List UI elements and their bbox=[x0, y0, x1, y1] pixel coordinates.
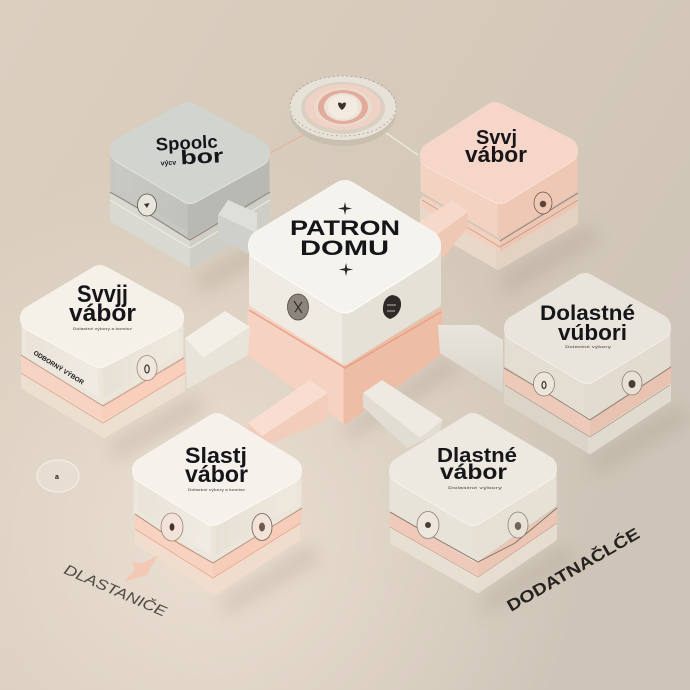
connector: lower-left pink bbox=[248, 380, 328, 447]
label: Spoolc vábor: bor bbox=[180, 145, 224, 169]
label: Svvj vábor: vábor bbox=[465, 142, 527, 167]
icon: pink box badge bbox=[534, 192, 552, 214]
label: Patron domu: PATRON bbox=[290, 216, 400, 240]
box: Slastí vábor (lower left) bbox=[135, 426, 302, 593]
connector lines to top badge bbox=[270, 130, 418, 155]
icon: centre left badge bbox=[288, 294, 308, 320]
label: Dlastné vábor: vábor bbox=[440, 461, 507, 484]
label: Slastí vábor: Dolastné výbory a komise bbox=[188, 488, 245, 492]
box: Svvj vábor (pink, top right) bbox=[422, 115, 578, 268]
label: Patron domu bbox=[290, 216, 400, 260]
label: Svvj vábor bbox=[465, 127, 527, 167]
label: Dodatnaiče: DODATNAČLĆE bbox=[504, 524, 643, 615]
centre pink base bbox=[249, 308, 345, 423]
icon: Dlastné right badge bbox=[508, 512, 528, 538]
arrow: pink floor arrow bbox=[123, 555, 158, 582]
box: Dlastné vábor (lower right) bbox=[390, 426, 557, 591]
connector: right white bbox=[438, 325, 503, 393]
box: Svvj vábor (left) bbox=[21, 278, 185, 436]
label: Slastí vábor: vábor bbox=[185, 461, 248, 487]
icon: centre right badge bbox=[383, 295, 401, 319]
connector: left white bbox=[185, 311, 250, 389]
label: Svvj vábor: Dolastné výbory a komise bbox=[73, 327, 132, 331]
label: Svvj vábor: vábor bbox=[69, 300, 136, 327]
icon: grey box badge bbox=[138, 194, 156, 216]
label: Dolastné vúbori bbox=[540, 302, 635, 349]
label: Svvj vábor: Svvjj bbox=[77, 281, 128, 308]
icon: small floor disc: a bbox=[55, 474, 59, 481]
icon: lower sparkle bbox=[339, 263, 353, 276]
icon: right box left badge bbox=[534, 372, 554, 396]
label: Spoolc vábor: Spoolc bbox=[155, 131, 218, 155]
icon: upper sparkle bbox=[338, 202, 352, 215]
label: Patron domu: DOMU bbox=[300, 236, 389, 260]
icon: small floor disc bbox=[37, 460, 79, 492]
label: Dolastné vúbori: vúbori bbox=[558, 320, 627, 345]
icon: left box badge bbox=[137, 356, 157, 380]
box: Spoolc vábor (grey, top left) bbox=[110, 115, 270, 267]
icon: right box right badge bbox=[622, 371, 642, 395]
label: Dlastné vábor: Dlastné bbox=[437, 445, 517, 467]
label: Spoolc vábor bbox=[155, 131, 224, 171]
label: Spoolc vábor: výcv bbox=[161, 160, 177, 167]
label: Dlastné vábor: Dolastné výbory bbox=[448, 486, 502, 490]
icon: Slastí right badge bbox=[252, 514, 272, 540]
label: Dlastné vábor bbox=[437, 445, 517, 490]
connector: pink to centre bbox=[418, 200, 468, 258]
label: Slastí vábor: Slastj bbox=[185, 443, 247, 468]
label: Slastí vábor bbox=[185, 443, 248, 492]
connector: grey to centre bbox=[218, 200, 257, 254]
label: Dlastanice: DLASTANIČE bbox=[61, 561, 169, 621]
label: Svvj vábor bbox=[69, 281, 136, 331]
label: Svvj vábor: Svvj bbox=[476, 127, 517, 149]
icon: Dlastné left badge bbox=[417, 512, 439, 538]
box: Patron domu (centre) bbox=[249, 196, 441, 423]
soft box shadows bbox=[110, 225, 690, 615]
small side text: ODBORNÝ VÝBOR bbox=[32, 348, 86, 387]
label: Dolastné vúbori: Dolastné bbox=[540, 302, 635, 325]
label: Dolastné vúbori: Dolastné výbory bbox=[565, 345, 611, 349]
icon: top concentric badge bbox=[290, 76, 396, 146]
box: Dolastné vúbori (right) bbox=[504, 286, 671, 452]
icon: Slastí left badge bbox=[161, 513, 183, 541]
connector: lower-right white bbox=[363, 380, 443, 448]
